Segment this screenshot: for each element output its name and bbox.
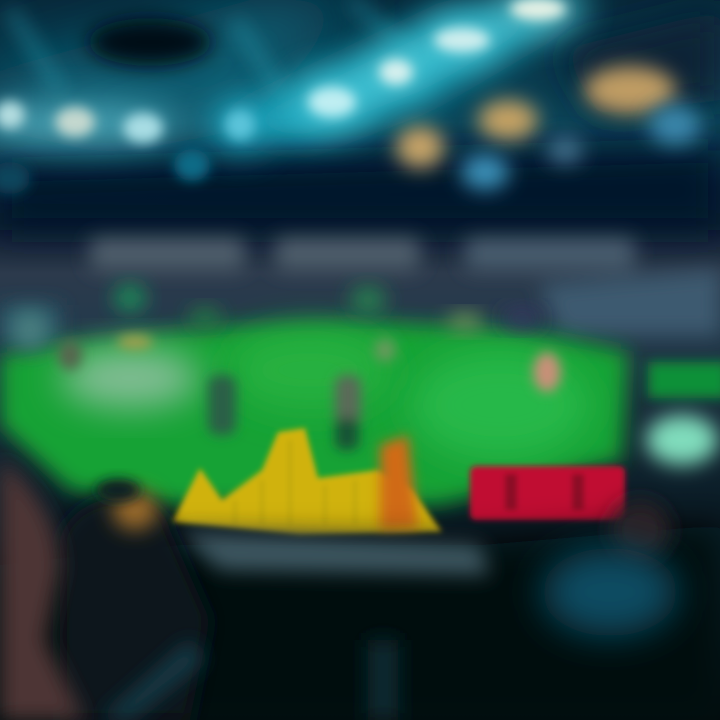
blue spotlights <box>461 105 701 190</box>
yellow bar chart shape <box>172 428 442 535</box>
red panel <box>470 466 625 520</box>
ceiling lights: white and cyan row <box>0 0 580 194</box>
right spectator <box>542 500 678 636</box>
black hanging scoreboard <box>88 18 212 66</box>
pitch highlights <box>12 284 590 460</box>
left spectator <box>60 479 210 720</box>
grey desk strip <box>180 532 490 575</box>
grey stand banners <box>0 238 720 345</box>
warm spotlights <box>396 66 676 168</box>
green pitch <box>0 322 628 505</box>
foreground post <box>368 640 398 720</box>
right green panel <box>648 362 720 398</box>
ceiling: teal glow and dark roof <box>0 0 720 230</box>
left arm in foreground <box>0 460 85 720</box>
players on pitch <box>58 335 561 450</box>
dark foreground <box>0 525 720 720</box>
orange bar <box>380 435 418 530</box>
right mint panel <box>646 415 718 465</box>
